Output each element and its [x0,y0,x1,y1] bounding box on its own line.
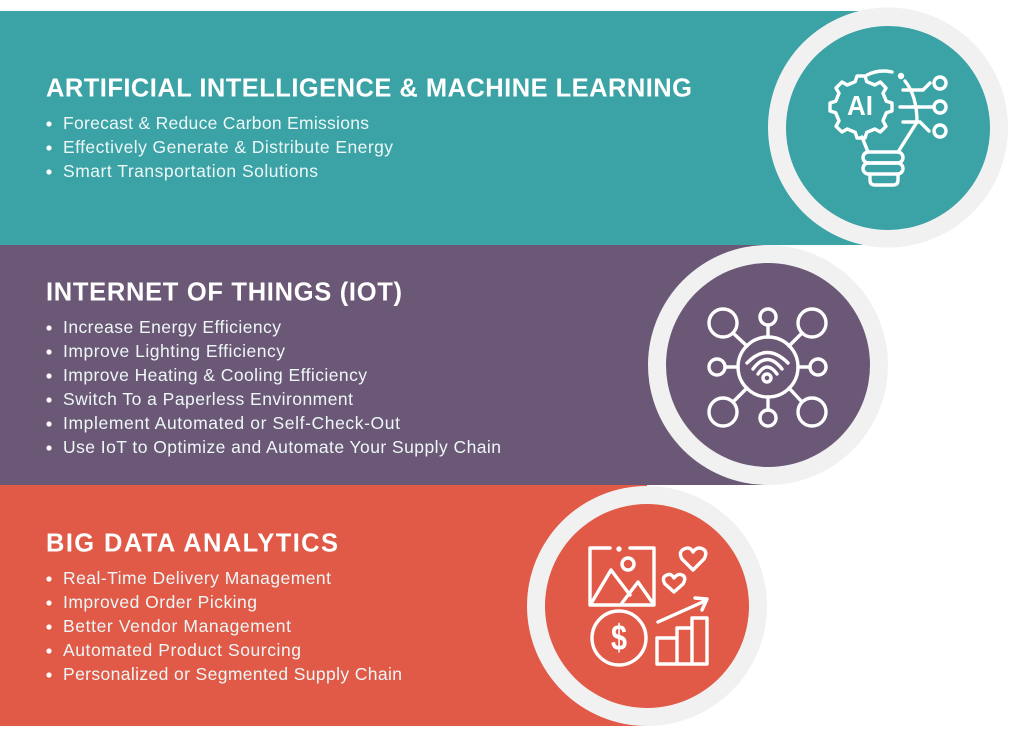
icon: wifi hub with connected nodes [709,309,826,426]
icon label: dollar sign: $ [611,617,627,658]
bullet list: IoT: Implement Automated or Self-Check-Out [63,413,400,433]
heading: AI and ML: ARTIFICIAL INTELLIGENCE & MACHINE LEARNING [46,74,692,102]
heading: big data: BIG DATA ANALYTICS [46,530,338,558]
icon label: AI: AI [847,90,873,121]
panel: big data analytics [0,485,647,726]
bullet list: big data: Real-Time Delivery Management [63,568,331,588]
bullet list: AI and ML [46,113,393,181]
badge: AI lightbulb [768,8,1008,248]
icon: image, hearts, dollar and growth chart [590,548,707,665]
bullet list: big data: Improved Order Picking [63,592,257,612]
bullet list: IoT: Use IoT to Optimize and Automate Your Supply Chain [63,437,501,457]
badge: IoT network [648,245,888,485]
panel: internet of things [0,245,768,485]
bullet list: big data: Personalized or Segmented Supply Chain [63,664,402,684]
bullet list: IoT: Improve Heating & Cooling Efficiency [63,365,367,385]
bullet list: big data [46,568,402,684]
heading: IoT: INTERNET OF THINGS (IOT) [46,278,402,306]
panel: artificial intelligence and machine learning [0,11,888,245]
bullet list: IoT: Increase Energy Efficiency [63,317,281,337]
icon: AI lightbulb with gear and circuits [830,71,946,185]
bullet list: IoT [46,317,501,457]
bullet list: big data: Better Vendor Management [63,616,291,636]
bullet list: AI and ML: Effectively Generate & Distribute Energy [63,137,393,157]
bullet list: AI and ML: Forecast & Reduce Carbon Emissions [63,113,369,133]
bullet list: big data: Automated Product Sourcing [63,640,301,660]
bullet list: IoT: Switch To a Paperless Environment [63,389,353,409]
bullet list: AI and ML: Smart Transportation Solutions [63,161,318,181]
teal band [0,11,888,245]
badge: big data [527,486,767,726]
purple band [0,245,768,485]
bullet list: IoT: Improve Lighting Efficiency [63,341,285,361]
red band [0,485,647,726]
